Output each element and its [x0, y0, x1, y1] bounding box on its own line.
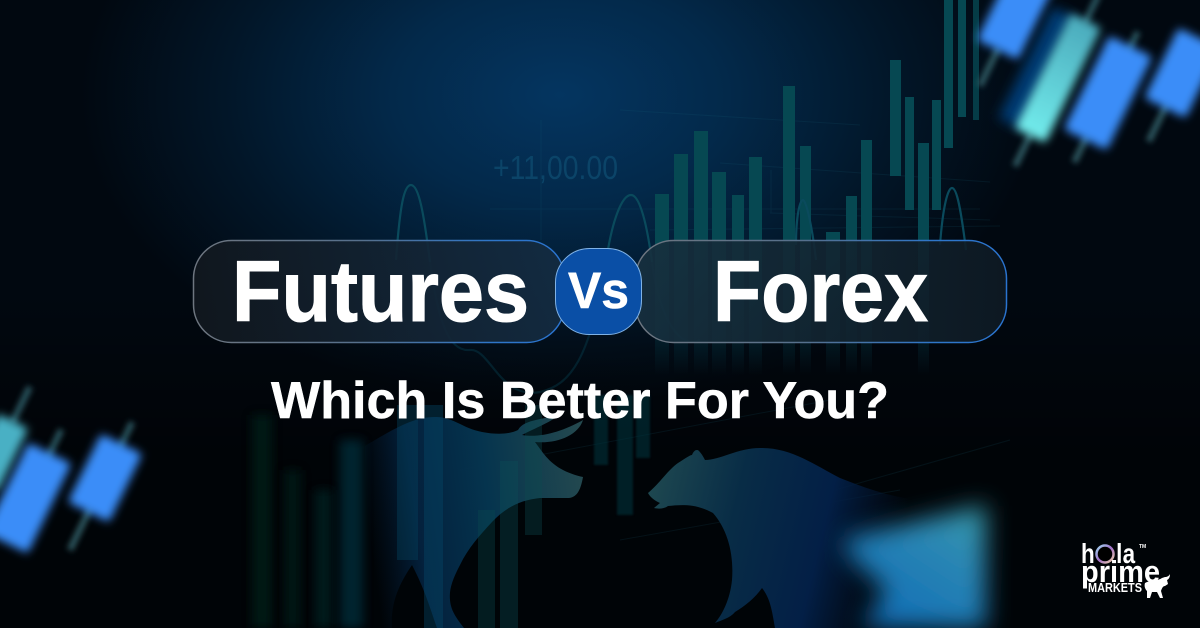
bars over bull — [397, 405, 542, 628]
candle: blue two — [1053, 21, 1159, 173]
logo word: markets: MARKETS — [1088, 581, 1142, 595]
logo trademark: TM — [1139, 544, 1146, 550]
badge label: Vs — [568, 262, 629, 319]
logo word: hola: ho la — [1081, 539, 1136, 570]
candlesticks top right — [959, 0, 1200, 174]
candle: blue right — [49, 412, 153, 560]
chart bars upper — [655, 0, 979, 375]
logo word: prime: prime — [1081, 554, 1160, 589]
candle: blue one — [959, 0, 1056, 96]
chart grid lines — [460, 110, 1010, 540]
bull silhouette — [365, 412, 583, 628]
wave line — [396, 185, 966, 393]
logo: hola prime markets — [1081, 539, 1170, 598]
subtitle: Which Is Better For You? — [271, 372, 889, 430]
candle: teal one — [983, 0, 1114, 174]
candle: blue left — [0, 419, 83, 553]
candlesticks bottom left — [0, 379, 153, 560]
bear silhouette — [648, 448, 920, 628]
heading: forex: Forex — [713, 244, 928, 340]
price label: +11,00.00 — [493, 149, 618, 186]
candle: teal partial — [0, 379, 45, 491]
blurred lower bars — [252, 395, 650, 628]
icon: bull — [1145, 574, 1170, 598]
panel: forex pill — [636, 240, 1006, 342]
panel: futures pill — [194, 240, 564, 342]
heading: futures: Futures — [232, 244, 529, 340]
blurred arrow — [846, 505, 986, 628]
badge: vs — [556, 248, 642, 334]
candle: blue three — [1128, 28, 1200, 151]
